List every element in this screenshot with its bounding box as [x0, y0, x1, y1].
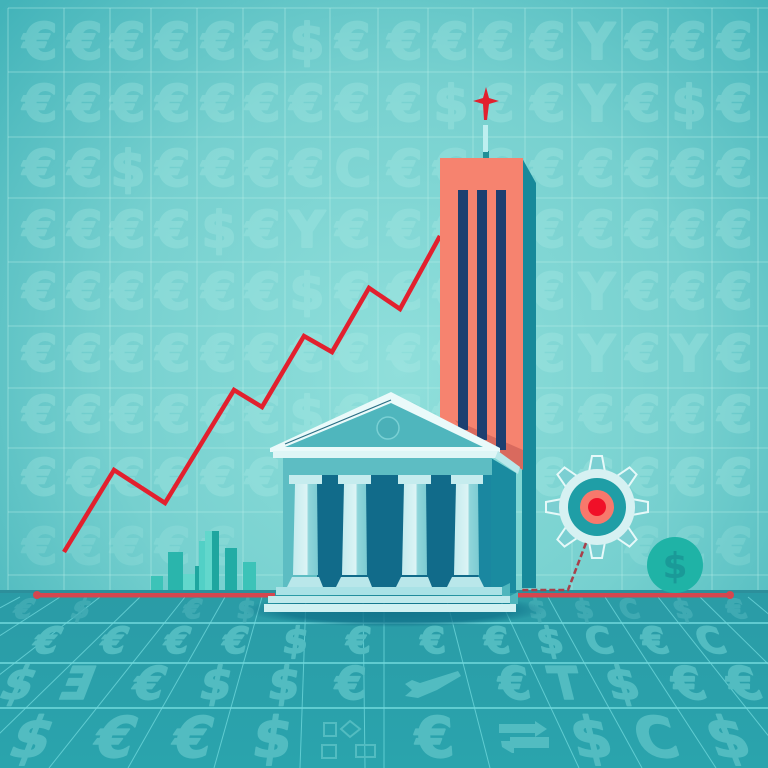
floor currency symbols: €	[125, 657, 174, 710]
floor currency symbols: $	[265, 657, 304, 710]
wall grid	[8, 8, 768, 590]
bank temple	[264, 392, 520, 612]
bar chart	[151, 531, 256, 590]
floor currency symbols: €	[158, 620, 196, 662]
currency symbols on wall: €€€€€€$€€€€€€€€€	[22, 386, 752, 444]
icon: squares on floor	[322, 721, 375, 758]
dark interior	[317, 475, 491, 587]
floor currency symbols: €	[179, 595, 205, 625]
floor currency symbols: $	[195, 657, 237, 710]
currency symbols on wall: €€€€€€€€€€€€€€	[22, 449, 752, 507]
floor currency symbols: $	[280, 619, 311, 662]
red growth line	[64, 236, 440, 552]
icon: arrows on floor	[499, 721, 549, 753]
tower stripes	[458, 190, 506, 450]
currency symbols on wall: €€$€€€€C€€€€€€€€	[22, 140, 752, 198]
dashed connector	[520, 543, 586, 590]
currency symbols on wall: €€€€€€$€€€€€Y€€€	[22, 13, 752, 71]
floor currency symbols: $	[235, 595, 257, 625]
floor currency symbols: €	[661, 658, 714, 710]
floor currency symbols: $	[525, 595, 550, 625]
floor currency symbols: C	[615, 595, 644, 625]
steps	[264, 583, 518, 612]
side wall	[491, 458, 516, 593]
floor currency symbols: $	[532, 620, 568, 662]
currency symbols on wall: €€€€€€$€€€€€Y€€€	[22, 263, 752, 321]
floor currency symbols: C	[580, 620, 619, 662]
floor currency symbols: €	[344, 621, 373, 662]
floor currency symbols: C	[688, 620, 733, 662]
currency symbols on wall: €€€€$€Y€€€€€€€€€	[22, 201, 752, 259]
floor currency symbols: T	[543, 658, 587, 710]
floor currency symbols: €	[93, 619, 135, 662]
floor currency symbols: €	[720, 595, 752, 625]
floor currency symbols: €	[493, 657, 535, 710]
coin with dollar	[647, 537, 703, 593]
floor currency symbols: Ǝ	[52, 658, 102, 710]
floor currency symbols: $	[571, 594, 597, 625]
floor currency symbols: €	[218, 619, 253, 662]
floor	[0, 590, 768, 768]
pediment	[270, 392, 520, 474]
floor currency symbols: €	[480, 619, 513, 662]
floor currency symbols: $	[598, 657, 646, 710]
tower	[440, 87, 536, 588]
floor currency symbols: €	[633, 619, 675, 662]
currency symbols on wall: €€€€€€€€€$€€Y€$€	[22, 75, 752, 133]
coin with dollar: $	[662, 546, 688, 587]
currency symbols on wall	[22, 13, 752, 576]
gear target	[546, 456, 648, 558]
floor currency symbols: €	[418, 621, 447, 662]
floor grid	[0, 597, 768, 768]
icon: plane on floor	[405, 671, 461, 698]
floor currency symbols: €	[7, 595, 39, 625]
wall background	[0, 0, 768, 590]
spire	[473, 87, 499, 158]
currency symbols on wall: €€€€€€€€€€€€Y€Y€	[22, 325, 752, 383]
temple shadow	[245, 593, 545, 627]
floor currency symbols	[0, 594, 768, 768]
floor currency symbols: €	[25, 620, 69, 662]
floor currency symbols: $	[668, 595, 698, 625]
frieze and left wall	[283, 458, 492, 587]
currency symbols on wall: €€€€€€€€	[22, 518, 752, 576]
columns	[287, 475, 484, 587]
floor currency symbols: €	[333, 657, 368, 710]
red baseline	[0, 590, 768, 599]
floor currency symbols: $	[66, 595, 96, 625]
